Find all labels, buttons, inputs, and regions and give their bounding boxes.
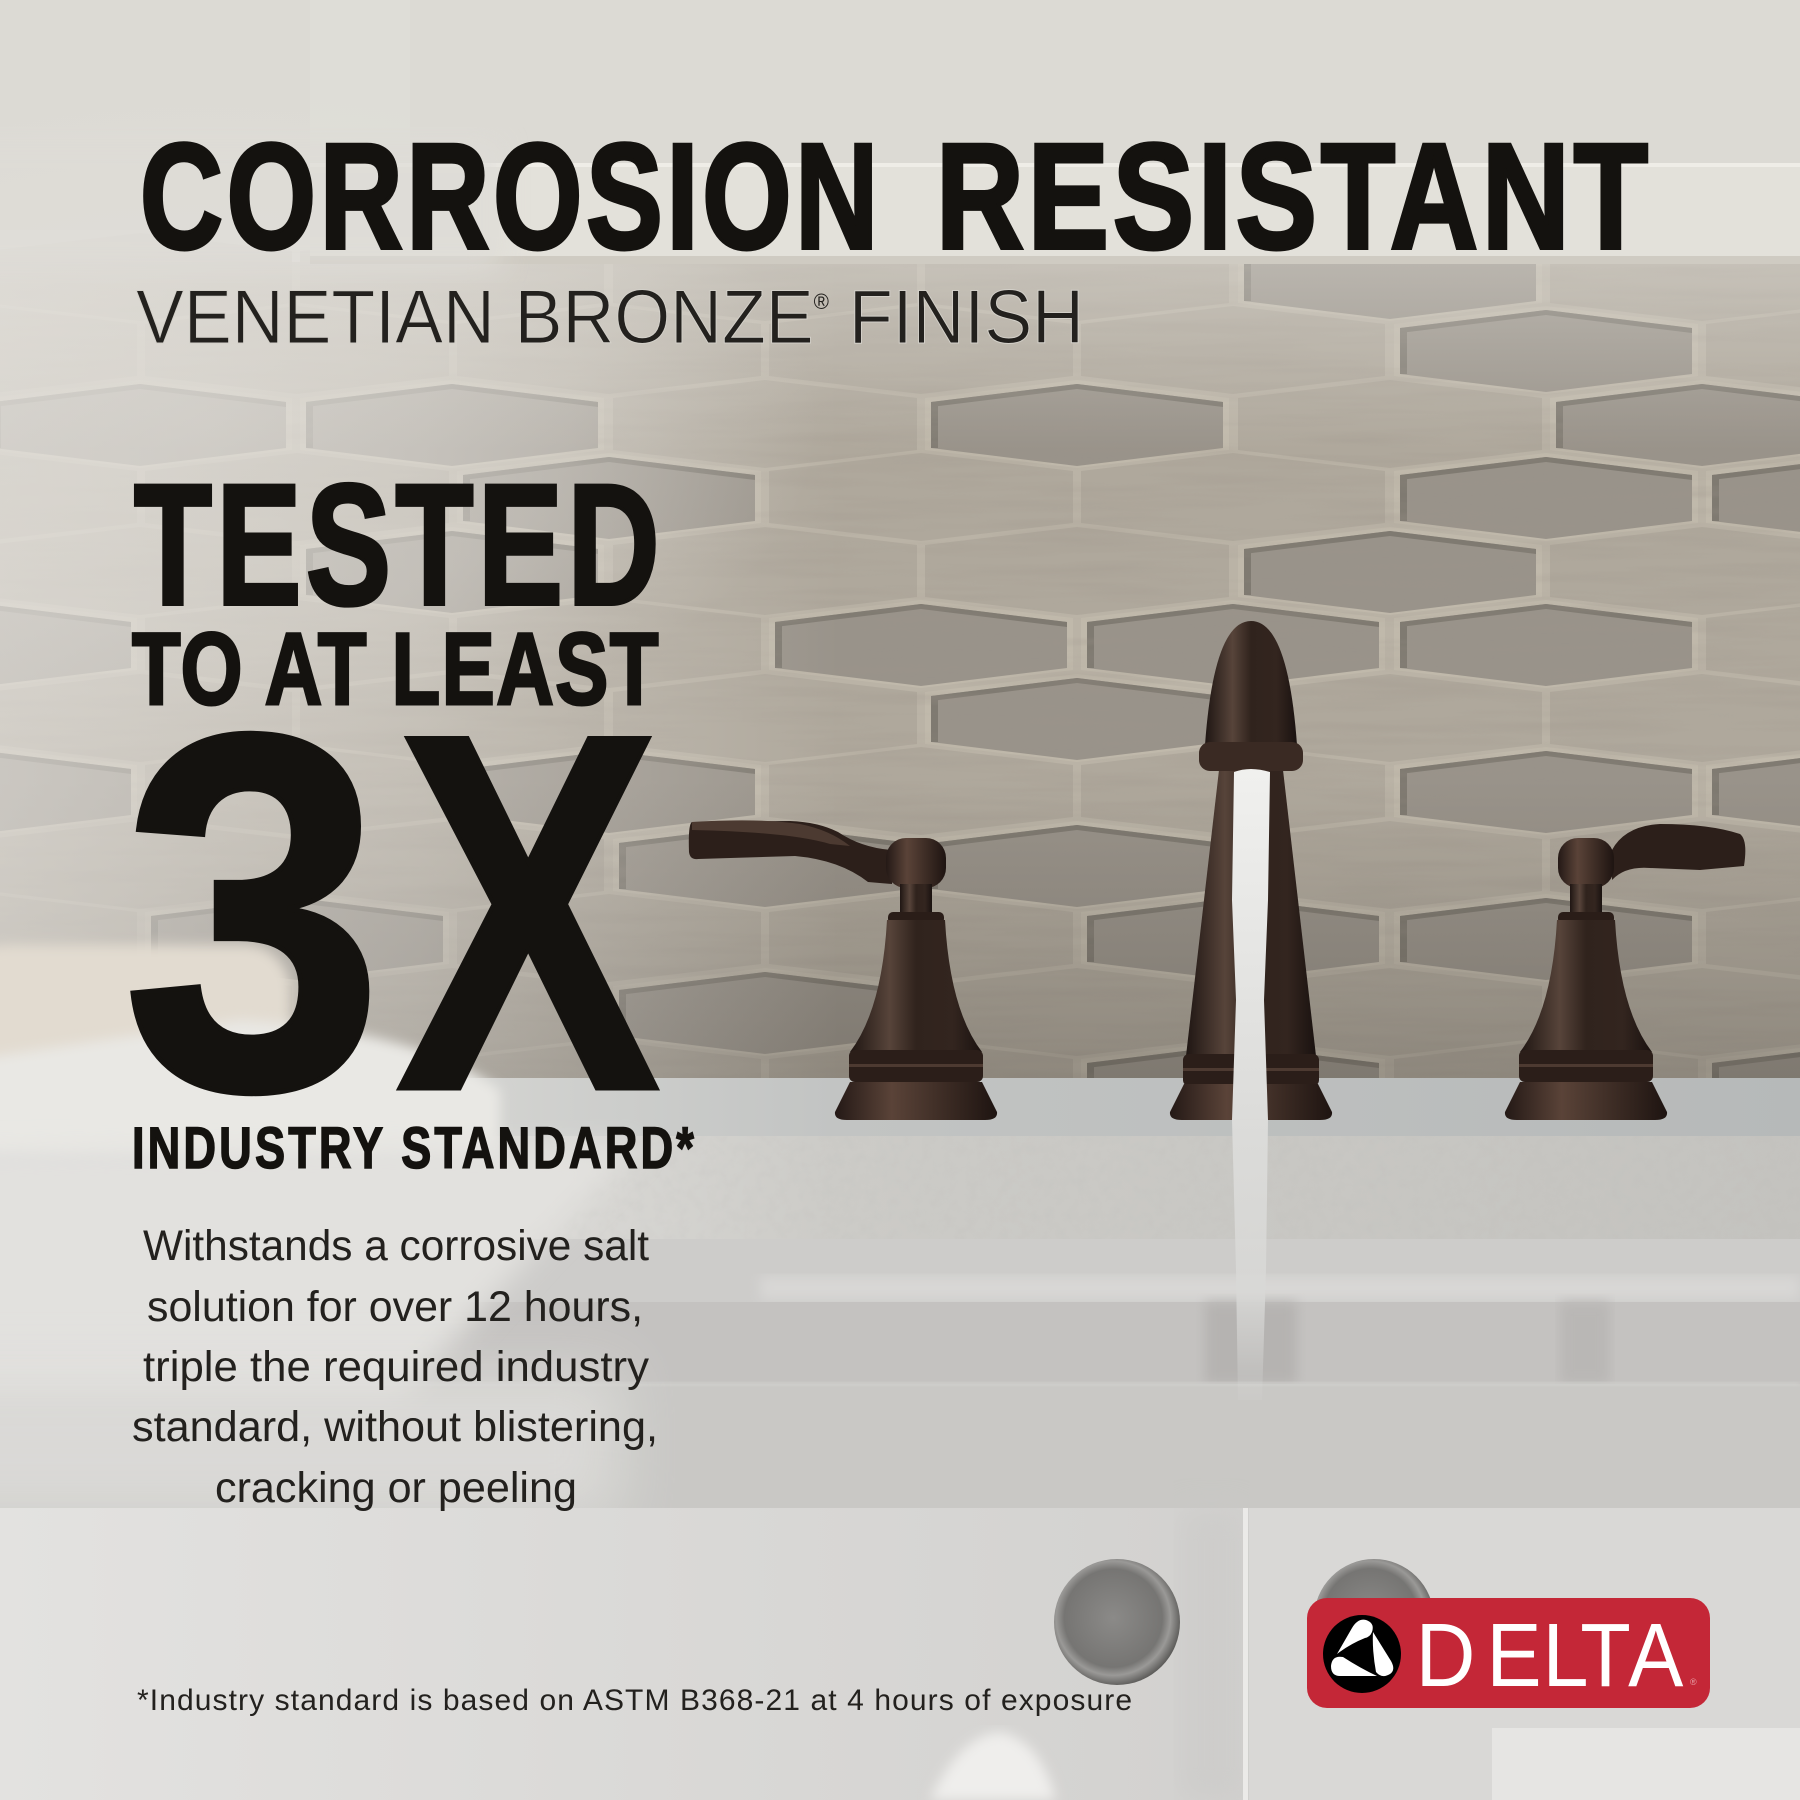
subtitle: FINISH <box>829 275 1084 360</box>
title <box>140 112 1652 280</box>
title: CORROSION <box>140 112 882 280</box>
Delta logo <box>1307 1598 1710 1708</box>
headline: 3X: 3 <box>122 628 384 1196</box>
logo wordmark: DELTA <box>1416 1606 1684 1706</box>
logo mark <box>1323 1615 1401 1693</box>
headline: 3X <box>122 628 662 1196</box>
right handle <box>1505 824 1745 1120</box>
countertop surface <box>420 1078 1800 1139</box>
registered mark: ® <box>1690 1677 1697 1687</box>
headline: 3X: X <box>396 628 662 1196</box>
left handle <box>689 820 997 1120</box>
tile backsplash <box>0 233 1800 1129</box>
upper wall <box>0 0 1800 270</box>
cabinet doors <box>0 1508 1800 1800</box>
subtitle: VENETIAN BRONZE <box>136 275 854 360</box>
cabinet knob right <box>1314 1559 1434 1679</box>
crown molding <box>0 0 1800 270</box>
water stream <box>1232 769 1270 1400</box>
footnote: *Industry standard is based on ASTM B368-21 at 4 hours of exposure <box>137 1684 1132 1717</box>
headline: tested: TESTED <box>134 449 664 641</box>
body text: standard, without blistering, <box>132 1403 658 1451</box>
headline: industry standard: INDUSTRY STANDARD* <box>132 1116 697 1181</box>
cabinet knob left <box>1054 1559 1180 1685</box>
body text: triple the required industry <box>143 1343 649 1391</box>
body text: solution for over 12 hours, <box>147 1283 643 1331</box>
body text <box>132 1222 658 1512</box>
left towel and soap <box>0 945 640 1520</box>
faucet <box>689 621 1745 1120</box>
center spout <box>1170 621 1332 1120</box>
body text: cracking or peeling <box>215 1464 577 1512</box>
left and top light fade <box>0 80 1800 1130</box>
countertop edge <box>420 1136 1800 1239</box>
sink under counter <box>0 1239 1800 1508</box>
headline: to at least: TO AT LEAST <box>132 612 660 726</box>
subtitle: ® <box>814 289 829 314</box>
title: RESISTANT <box>936 112 1652 280</box>
body text: Withstands a corrosive salt <box>143 1222 649 1270</box>
logo background <box>1307 1598 1710 1708</box>
